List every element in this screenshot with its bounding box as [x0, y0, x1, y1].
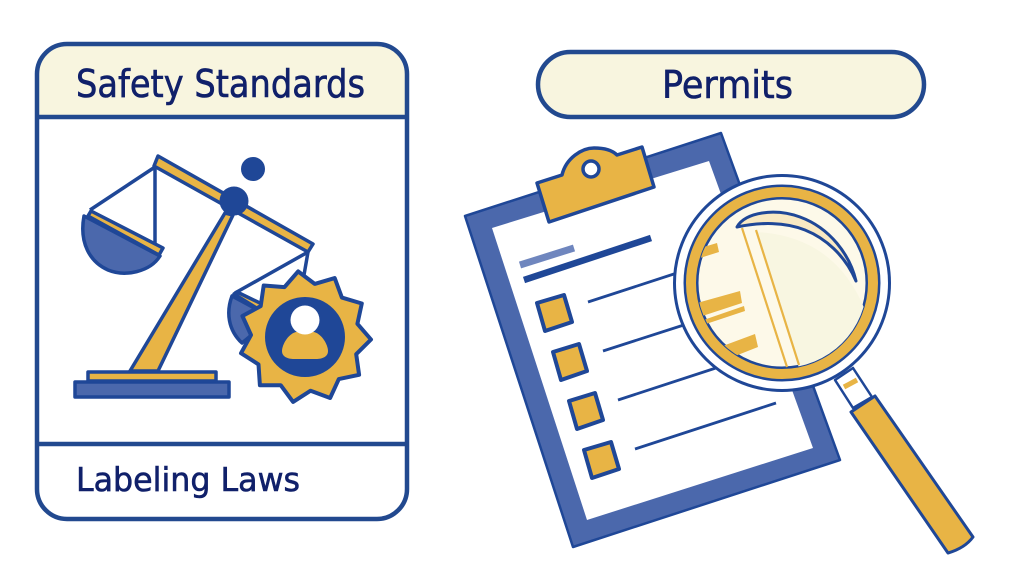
- magnifier neck: [835, 368, 872, 408]
- left pan strings: [90, 167, 155, 244]
- magnifier outer ring: [674, 176, 890, 390]
- icon: clipboard: [465, 133, 840, 547]
- icon: magnifying glass: [674, 176, 973, 553]
- magnifier gold rim: [691, 192, 873, 374]
- clipboard board: [465, 133, 840, 547]
- card header band: [37, 44, 407, 117]
- magnifier handle: [851, 396, 973, 553]
- checkbox 4: [584, 442, 619, 478]
- scale base: [75, 382, 229, 397]
- lens contents: [690, 228, 865, 368]
- clipboard paper: [492, 161, 813, 520]
- card outline: [37, 44, 407, 519]
- scale beam: [154, 156, 313, 252]
- checkbox 2: [553, 344, 587, 380]
- left pan: [83, 216, 160, 273]
- checkbox 1: [537, 295, 572, 331]
- checkbox 3: [569, 393, 603, 429]
- panel: safety standards card: [37, 44, 407, 519]
- right pan strings: [235, 252, 308, 293]
- pivot: [220, 186, 248, 216]
- checklist lines: [588, 272, 776, 449]
- small dot: [241, 157, 265, 181]
- scale column: [130, 213, 233, 371]
- icon: gear badge with person: [241, 271, 371, 402]
- heading: Permits: Permits: [662, 63, 793, 107]
- lens highlight: [737, 212, 856, 281]
- panel: permits pill: [538, 52, 924, 117]
- text: Labeling Laws: Labeling Laws: [76, 460, 300, 499]
- heading: Safety Standards: Safety Standards: [76, 62, 365, 106]
- right pan: [229, 296, 270, 343]
- clipboard clip: [537, 147, 654, 222]
- paper heading bars: [520, 248, 574, 265]
- icon: balance scale: [75, 156, 371, 402]
